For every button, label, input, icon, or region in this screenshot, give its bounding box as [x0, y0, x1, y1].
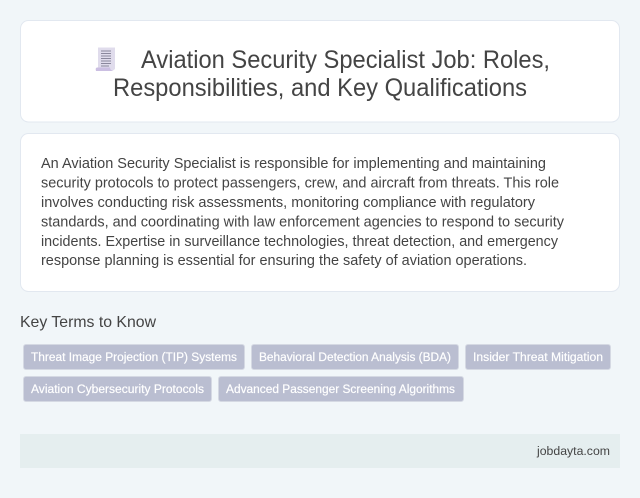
- tag: insider threat: [466, 344, 610, 370]
- tag: passenger screening: Advanced Passenger Screening Algorithms: [226, 382, 455, 396]
- panel: title card: [20, 20, 620, 122]
- text block: role description: [41, 156, 565, 269]
- tag: threat image projection: Threat Image Projection (TIP) Systems: [31, 350, 237, 364]
- footer: jobdayta.com: [536, 444, 610, 458]
- text block: role description: An Aviation Security Specialist is responsible for implementing and maintaining: [41, 156, 546, 172]
- tag: behavioral detection: Behavioral Detection Analysis (BDA): [259, 350, 451, 364]
- tag: aviation cybersecurity: Aviation Cybersecurity Protocols: [31, 382, 204, 396]
- text block: role description: incidents. Expertise in surveillance technologies, threat detection, and emergency: [41, 234, 559, 250]
- title: Aviation Security Specialist Job: Roles,: [141, 46, 550, 74]
- tag list: key terms: [24, 344, 610, 402]
- tag: behavioral detection: [252, 344, 458, 370]
- tag: threat image projection: [24, 344, 244, 370]
- tag: passenger screening: [218, 376, 464, 402]
- panel: description card: [20, 134, 620, 292]
- text block: role description: response planning is essential for ensuring the safety of aviation operations.: [41, 253, 527, 269]
- text block: role description: security protocols to protect passengers, crew, and aircraft from threats. This role: [41, 176, 559, 192]
- text block: role description: involves conducting risk assessments, monitoring compliance with regulatory: [41, 195, 536, 211]
- icon: document scroll: [96, 48, 115, 71]
- footer: [20, 434, 620, 468]
- tag: insider threat: Insider Threat Mitigation: [473, 350, 603, 364]
- title: [113, 46, 550, 102]
- heading: key terms: Key Terms to Know: [20, 314, 156, 331]
- title: Responsibilities, and Key Qualifications: [113, 74, 527, 102]
- tag: aviation cybersecurity: [24, 376, 212, 402]
- text block: role description: standards, and coordinating with law enforcement agencies to respond to security: [41, 214, 565, 230]
